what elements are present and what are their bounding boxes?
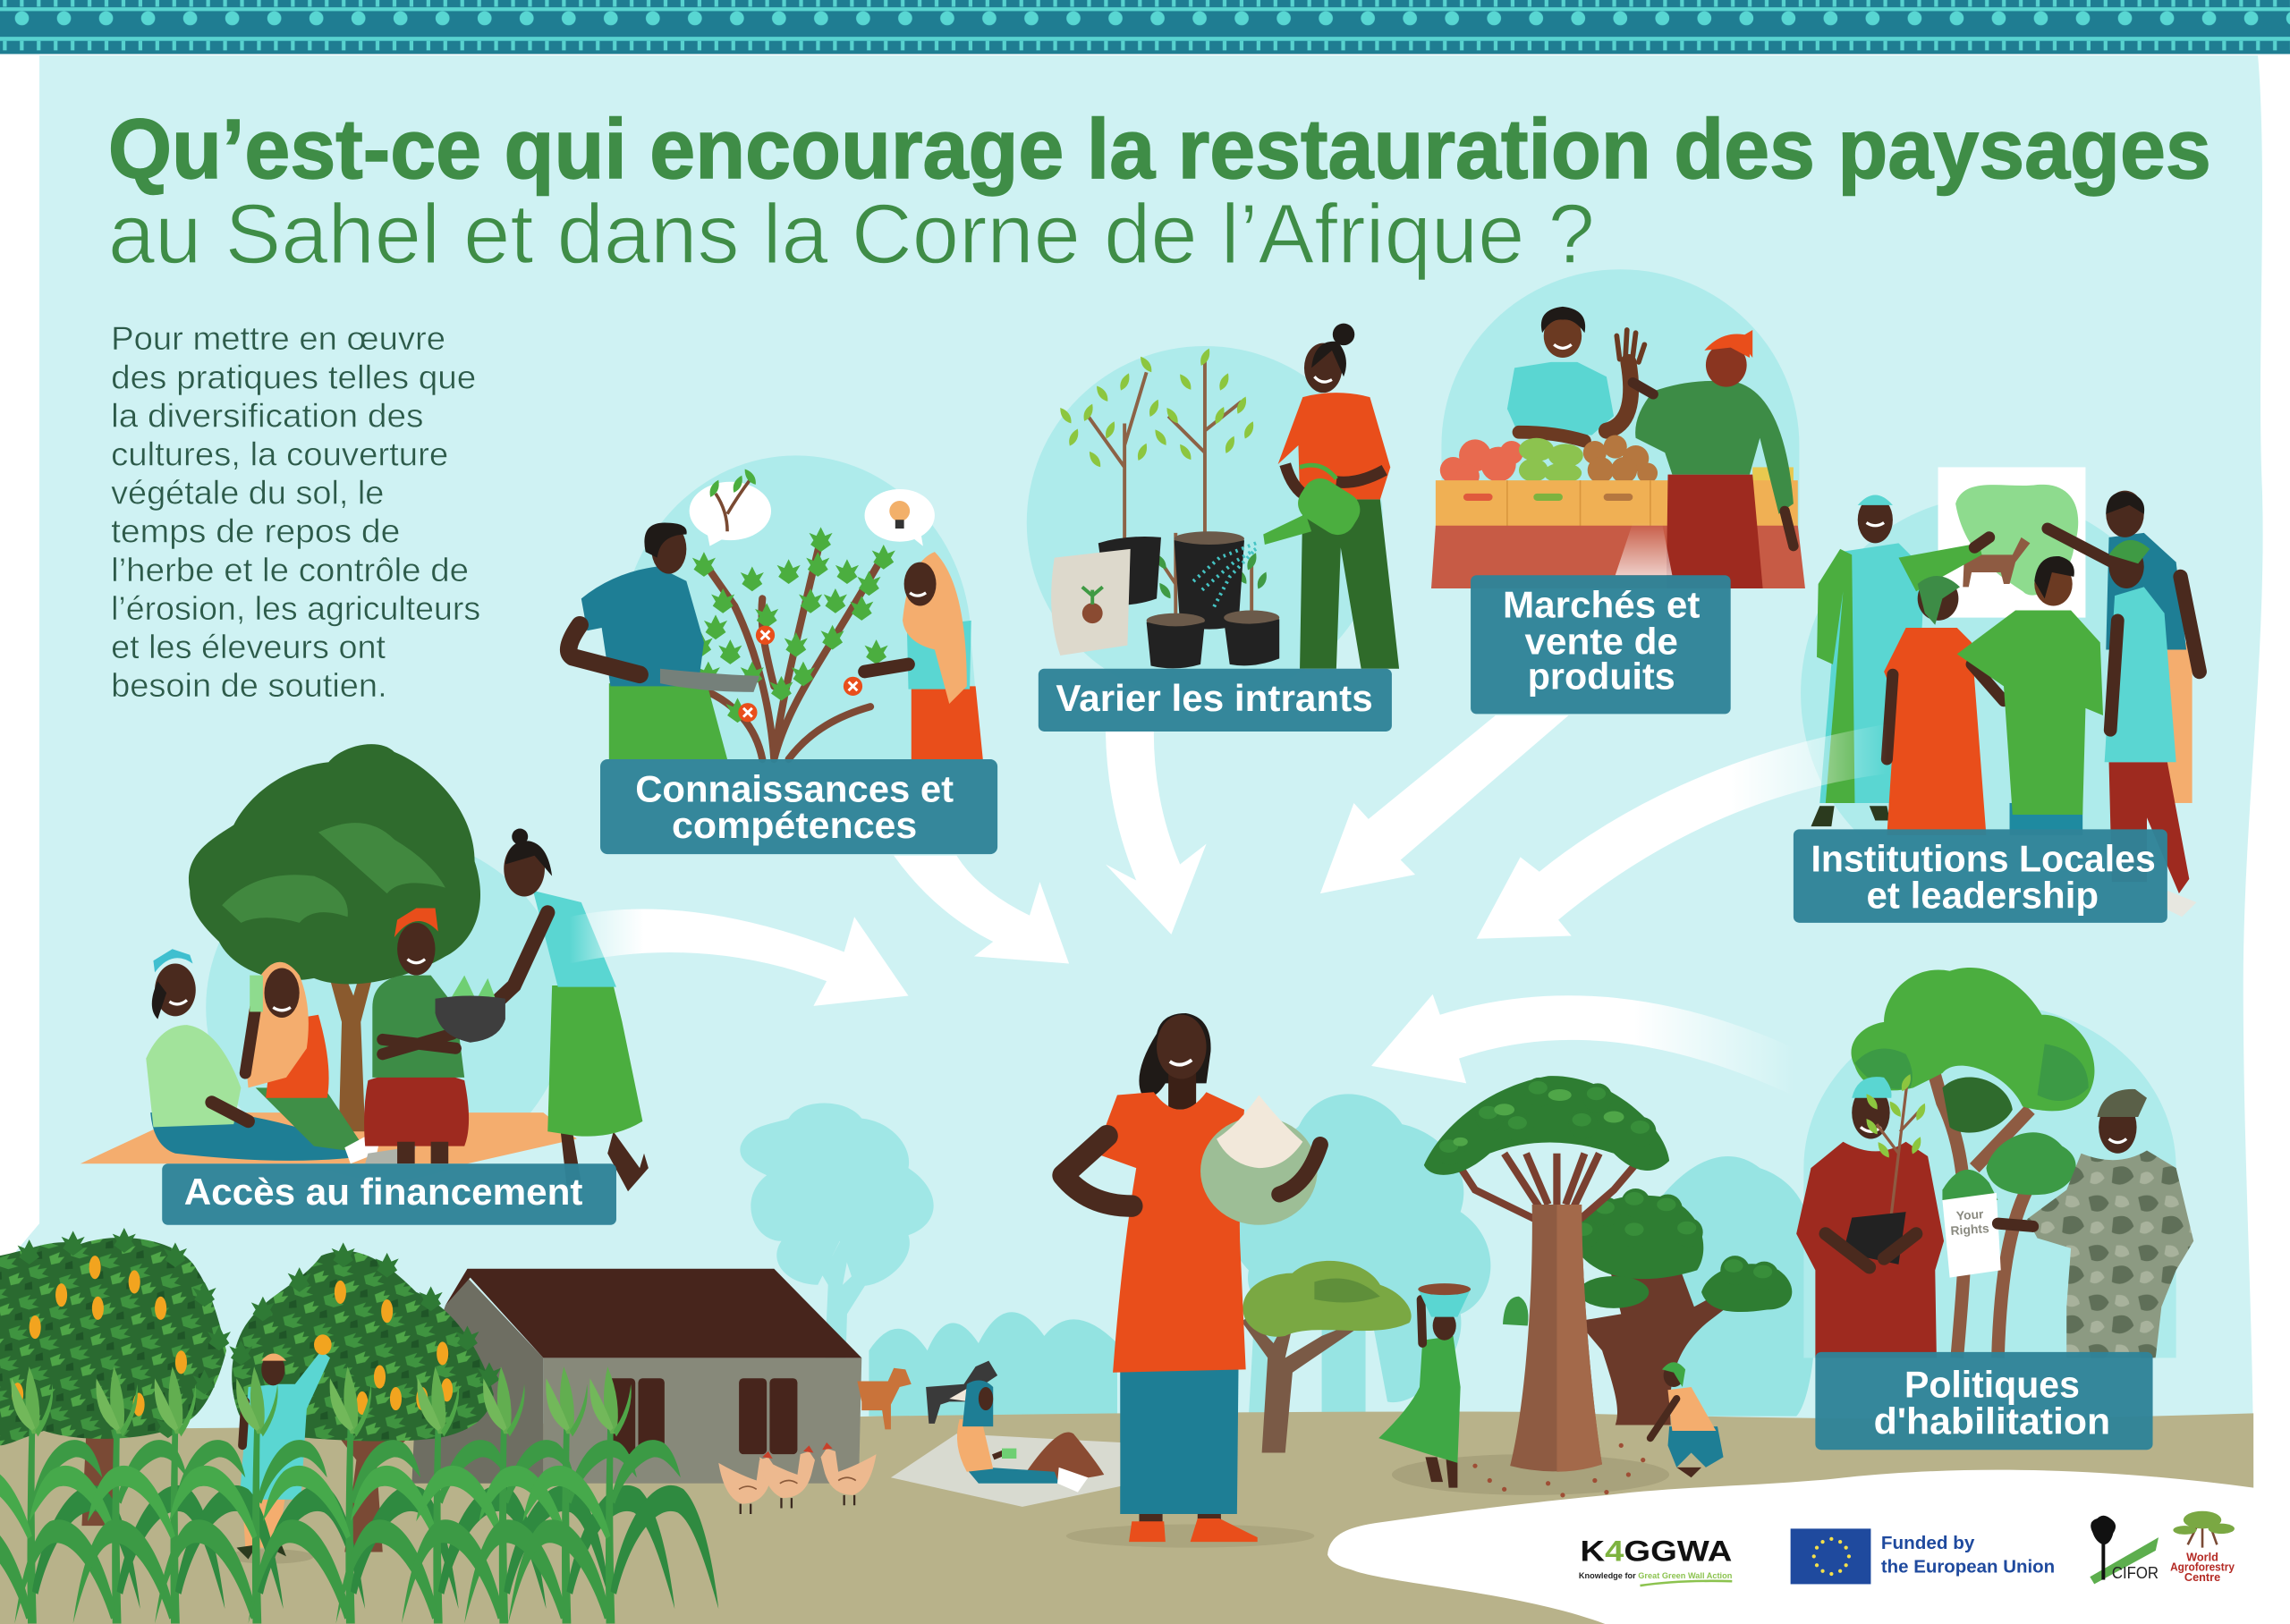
pruning marks	[738, 626, 862, 722]
panel: politiques d'habilitation illustration	[1796, 968, 2193, 1358]
arrow: markets to centre	[1320, 715, 1568, 893]
shade tree	[189, 744, 480, 1131]
intro paragraph: et les éleveurs ont	[111, 629, 386, 665]
intro paragraph: temps de repos de	[111, 513, 400, 550]
produce crates and stall	[1431, 436, 1805, 588]
man in turquoise with green cap	[2105, 540, 2197, 917]
logo: CIFOR: CIFOR	[2112, 1563, 2159, 1582]
man in green and turquoise robe	[1811, 495, 1989, 826]
background trees	[740, 1094, 1815, 1417]
goats	[857, 1361, 997, 1429]
label: connaissances et competences: compétences	[672, 804, 917, 846]
title	[108, 102, 2211, 282]
woman in orange dress	[1884, 576, 2004, 835]
label: institutions locales et leadership: Institutions Locales	[1811, 838, 2156, 880]
header patterned band	[0, 0, 2290, 54]
soldier in camouflage	[1997, 1089, 2193, 1358]
your rights document	[1942, 1193, 2001, 1278]
label: connaissances et competences: Connaissances et	[635, 767, 954, 809]
speech bubble: tree	[690, 467, 771, 546]
person in green seen from behind	[1957, 556, 2103, 835]
logo: European Union: the European Union	[1881, 1557, 2055, 1577]
arrow: inputs to centre	[1106, 732, 1207, 935]
label: institutions locales et leadership: et leadership	[1867, 875, 2099, 917]
shade trees	[1851, 968, 2094, 1358]
woven mat	[81, 1112, 577, 1163]
your rights document: Your	[1955, 1206, 1984, 1222]
label: politiques d'habilitation	[1815, 1352, 2153, 1450]
intro paragraph: cultures, la couverture	[111, 436, 448, 472]
speech bubble: lightbulb	[865, 489, 935, 546]
central woman with bowl	[1064, 1013, 1320, 1548]
panel: marches et vente illustration	[1431, 269, 1805, 588]
intro paragraph: des pratiques telles que	[111, 359, 476, 395]
label: varier les intrants: Varier les intrants	[1056, 677, 1373, 719]
woman drying grain on mat	[891, 1381, 1120, 1507]
woman with watering can	[1191, 324, 1399, 669]
label: marches et vente de produits: vente de	[1524, 620, 1678, 662]
arrow: knowledge to centre	[894, 856, 1069, 964]
label: institutions locales et leadership	[1794, 829, 2167, 923]
your rights document: Rights	[1950, 1221, 1989, 1238]
seed bag	[1051, 549, 1131, 656]
logo: World Agroforestry Centre	[2170, 1511, 2235, 1584]
mango tree right	[229, 1242, 501, 1552]
man with machete	[569, 522, 759, 759]
seated woman with orange headwrap	[364, 909, 469, 1163]
label: connaissances et competences	[600, 759, 997, 854]
rear baobab tree	[1503, 1188, 1792, 1425]
intro paragraph: besoin de soutien.	[111, 667, 387, 704]
label: acces au financement: Accès au financement	[184, 1171, 583, 1213]
logo: World Agroforestry Centre: Centre	[2184, 1570, 2220, 1584]
label: marches et vente de produits: produits	[1528, 656, 1675, 698]
white logo area	[1327, 1470, 2290, 1624]
seeds on the ground	[1472, 1443, 1645, 1497]
intro paragraph: l’herbe et le contrôle de	[111, 552, 469, 588]
crouching woman	[1650, 1362, 1724, 1477]
map board with cow	[1938, 467, 2085, 618]
logo: CIFOR	[2090, 1516, 2159, 1584]
logo: European Union: Funded by	[1881, 1534, 1975, 1553]
seated woman with turquoise headwrap	[146, 949, 358, 1161]
man in red robe with sapling	[1796, 1072, 1944, 1358]
panel: varier les intrants illustration	[1027, 324, 1399, 699]
man picking mangoes	[226, 1334, 332, 1564]
arrow: institutions to centre	[1477, 724, 1887, 939]
label: acces au financement	[162, 1163, 616, 1225]
label: politiques d'habilitation: Politiques	[1904, 1363, 2080, 1405]
ground	[0, 1411, 2253, 1624]
panel: acces au financement illustration	[81, 744, 649, 1191]
pruned bush	[674, 527, 895, 759]
seated woman in hijab holding banknote	[245, 962, 416, 1163]
chickens	[718, 1442, 877, 1514]
arrow: policies to centre	[1371, 994, 1795, 1096]
panel: connaissances et competences illustration	[569, 455, 983, 759]
title: Qu’est-ce qui encourage la restauration des paysages	[108, 102, 2211, 197]
intro paragraph: l’érosion, les agriculteurs	[111, 590, 480, 627]
woman in hijab	[865, 552, 983, 759]
maize field	[0, 1366, 718, 1624]
acacia tree	[1242, 1261, 1412, 1452]
intro paragraph: la diversification des	[111, 397, 423, 434]
arrow: finance to centre	[570, 909, 909, 1006]
intro paragraph: végétale du sol, le	[111, 475, 384, 512]
mango tree left	[0, 1228, 231, 1526]
farmhouse	[411, 1269, 861, 1484]
title: au Sahel et dans la Corne de l’Afrique ?	[108, 187, 1595, 282]
logo: World Agroforestry Centre: Agroforestry	[2170, 1561, 2235, 1574]
market vendor	[1507, 307, 1644, 441]
logo: K4GGWA	[1579, 1534, 1733, 1586]
customer woman	[1633, 330, 1794, 588]
label: varier les intrants	[1039, 669, 1392, 732]
logo: K4GGWA: K4GGWA	[1581, 1534, 1732, 1567]
panel: institutions locales illustration	[1801, 467, 2200, 917]
label: marches et vente de produits	[1471, 575, 1731, 714]
woman carrying basket	[1378, 1283, 1471, 1488]
label: politiques d'habilitation: d'habilitation	[1874, 1400, 2110, 1442]
logo: World Agroforestry Centre: World	[2186, 1550, 2218, 1563]
seedlings in pots	[1057, 347, 1279, 668]
logo: European Union	[1791, 1528, 2055, 1584]
label: marches et vente de produits: Marchés et	[1503, 584, 1701, 626]
logo: K4GGWA: Knowledge for Great Green Wall Action	[1579, 1571, 1733, 1581]
intro paragraph: Pour mettre en œuvre	[111, 320, 445, 357]
man pointing behind	[2048, 491, 2200, 803]
main baobab tree	[1392, 1076, 1669, 1495]
intro paragraph	[111, 320, 480, 704]
standing woman with cooking pot	[436, 829, 649, 1191]
